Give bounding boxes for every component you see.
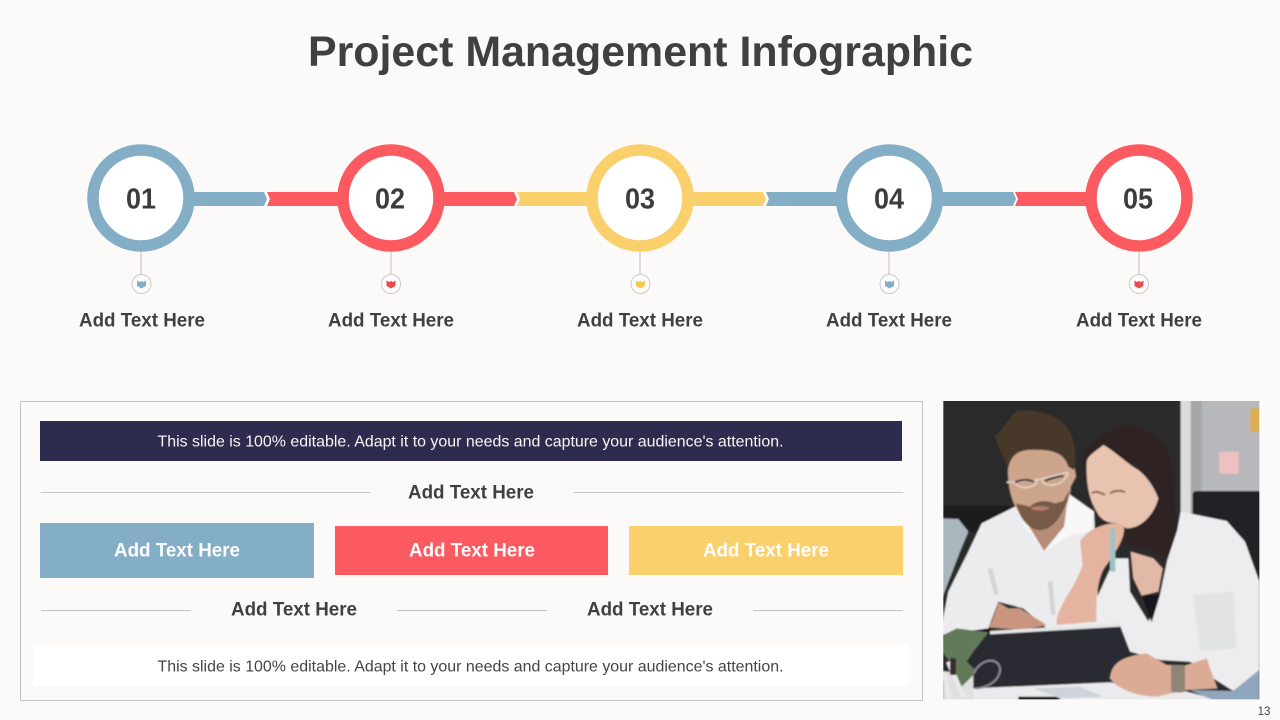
box: yellow xyxy=(629,526,903,575)
title: Project Management Infographic xyxy=(308,28,973,76)
box: red xyxy=(335,526,608,575)
woman's hair xyxy=(1092,445,1176,556)
arrow: connector segments xyxy=(185,192,1095,206)
man's hand xyxy=(988,602,1047,630)
plant xyxy=(943,672,973,702)
step 05 xyxy=(1076,150,1202,332)
woman's arm and hand xyxy=(1057,523,1124,625)
subheading: right: Add Text Here xyxy=(587,600,713,620)
step 04: Add Text Here xyxy=(826,310,952,332)
step 04: 04 xyxy=(874,184,904,216)
man's hair xyxy=(995,411,1075,470)
step 03 xyxy=(577,150,703,332)
step 04 xyxy=(826,150,952,332)
step 03: 03 xyxy=(625,184,655,216)
box: red: Add Text Here xyxy=(409,540,535,562)
woman's shirt xyxy=(1096,512,1259,691)
step 02: 02 xyxy=(375,184,405,216)
box: blue xyxy=(40,523,314,578)
step 03: Add Text Here xyxy=(577,310,703,332)
step 01: Add Text Here xyxy=(79,310,205,332)
tablet xyxy=(988,628,1111,636)
photo: two colleagues reviewing a tablet xyxy=(940,395,1267,705)
banner: dark editable text: This slide is 100% editable. Adapt it to your needs and capture your audience's attention. xyxy=(158,434,784,450)
glasses xyxy=(1007,472,1068,488)
box: blue: Add Text Here xyxy=(114,540,240,562)
timeline: five numbered steps xyxy=(79,150,1202,332)
woman's hand on tablet, watch xyxy=(1110,653,1217,697)
step 01: 01 xyxy=(126,184,156,216)
page number: 13 xyxy=(1258,706,1270,718)
table xyxy=(972,681,1214,700)
woman's face xyxy=(1087,445,1158,528)
step 05: Add Text Here xyxy=(1076,310,1202,332)
step 02: Add Text Here xyxy=(328,310,454,332)
banner: dark editable text xyxy=(40,421,902,461)
step 01 xyxy=(79,150,205,332)
man's neck and face xyxy=(1028,506,1068,552)
man's shirt xyxy=(940,493,1099,635)
panel: text content xyxy=(20,402,922,700)
subheading: Add Text Here xyxy=(408,482,534,504)
step 05: 05 xyxy=(1123,184,1153,216)
banner: white editable text: This slide is 100% editable. Adapt it to your needs and capture your audience's attention. xyxy=(158,658,784,676)
banner: white editable text xyxy=(33,645,909,686)
box: yellow: Add Text Here xyxy=(703,540,829,562)
subheading: left: Add Text Here xyxy=(231,600,357,620)
step 02 xyxy=(328,150,454,332)
